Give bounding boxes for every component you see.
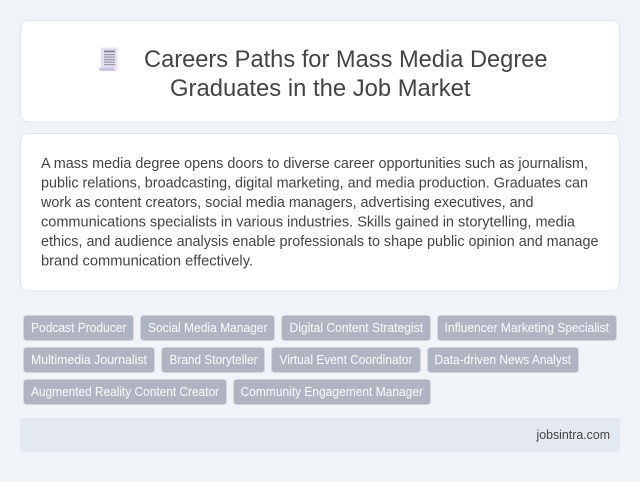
description text: [40, 156, 598, 270]
tag: Community Engagement Manager: [234, 380, 430, 404]
tag: Brand Storyteller: Brand Storyteller: [170, 352, 258, 367]
tag: Social Media Manager: [140, 316, 274, 340]
tag: Data-driven News Analyst: Data-driven News Analyst: [434, 352, 571, 367]
description text: A mass media degree opens doors to diverse career opportunities such as journalism,: [41, 156, 588, 172]
tag: Brand Storyteller: [162, 348, 264, 372]
footer: [20, 418, 620, 452]
tag: Data-driven News Analyst: [428, 348, 578, 372]
tag: Podcast Producer: [24, 316, 134, 340]
description text: brand communication effectively.: [41, 254, 253, 270]
tag: Augmented Reality Content Creator: Augmented Reality Content Creator: [31, 384, 220, 399]
title text: [144, 46, 548, 102]
tag list: [24, 316, 616, 404]
description text: communications specialists in various industries. Skills gained in storytelling, media: [41, 214, 576, 230]
panel: title header: [20, 20, 620, 122]
tag: Social Media Manager: Social Media Manager: [148, 320, 268, 335]
tag: Podcast Producer: Podcast Producer: [31, 320, 127, 335]
tag: Virtual Event Coordinator: [272, 348, 420, 372]
tag: Community Engagement Manager: Community Engagement Manager: [240, 384, 424, 399]
tag: Multimedia Journalist: [24, 348, 154, 372]
icon: document: [99, 48, 118, 71]
tag: Influencer Marketing Specialist: [438, 316, 616, 340]
tag: Digital Content Strategist: [282, 316, 430, 340]
tag: Digital Content Strategist: Digital Content Strategist: [290, 320, 423, 335]
title text: Careers Paths for Mass Media Degree: [144, 46, 548, 73]
tag: Augmented Reality Content Creator: [24, 380, 226, 404]
tag: Influencer Marketing Specialist: Influencer Marketing Specialist: [444, 320, 609, 335]
description text: ethics, and audience analysis enable professionals to shape public opinion and manage: [41, 234, 598, 250]
footer source text: jobsintra.com: [536, 427, 610, 442]
panel: description: [20, 134, 620, 291]
description text: work as content creators, social media managers, advertising executives, and: [40, 195, 534, 211]
tag: Virtual Event Coordinator: Virtual Event Coordinator: [280, 352, 413, 367]
title text: Graduates in the Job Market: [170, 75, 471, 102]
tag: Multimedia Journalist: Multimedia Journalist: [31, 352, 147, 367]
description text: public relations, broadcasting, digital marketing, and media production. Graduates can: [41, 176, 588, 192]
